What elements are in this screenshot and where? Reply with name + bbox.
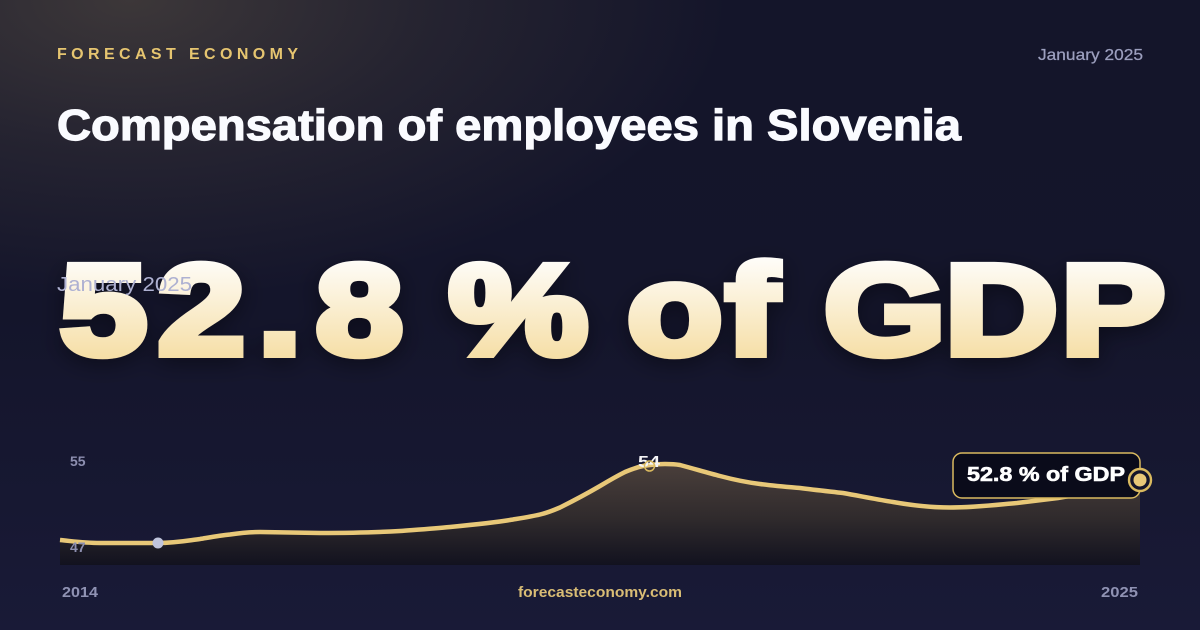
line chart [60, 453, 1151, 565]
title: Compensation of employees in Slovenia [57, 101, 962, 150]
headline value: 52.8 % of GDP [60, 239, 1165, 382]
gold trend line [60, 464, 1140, 543]
callout: 52.8 % of GDP [967, 464, 1125, 486]
website: forecasteconomy.com [518, 585, 682, 601]
start year: 2014 [62, 584, 99, 601]
area under line [60, 464, 1140, 565]
callout [953, 453, 1140, 498]
end year: 2025 [1101, 584, 1138, 601]
brand label: FORECAST ECONOMY [57, 46, 298, 63]
end marker [1129, 469, 1151, 491]
date overlay: January 2025 [57, 274, 192, 296]
axis label 55: 55 [70, 453, 86, 469]
peak label 54: 54 [638, 454, 660, 471]
minimum marker [152, 538, 164, 548]
peak marker [644, 461, 654, 471]
date top right: January 2025 [1038, 47, 1143, 64]
axis label 47: 47 [70, 539, 86, 555]
